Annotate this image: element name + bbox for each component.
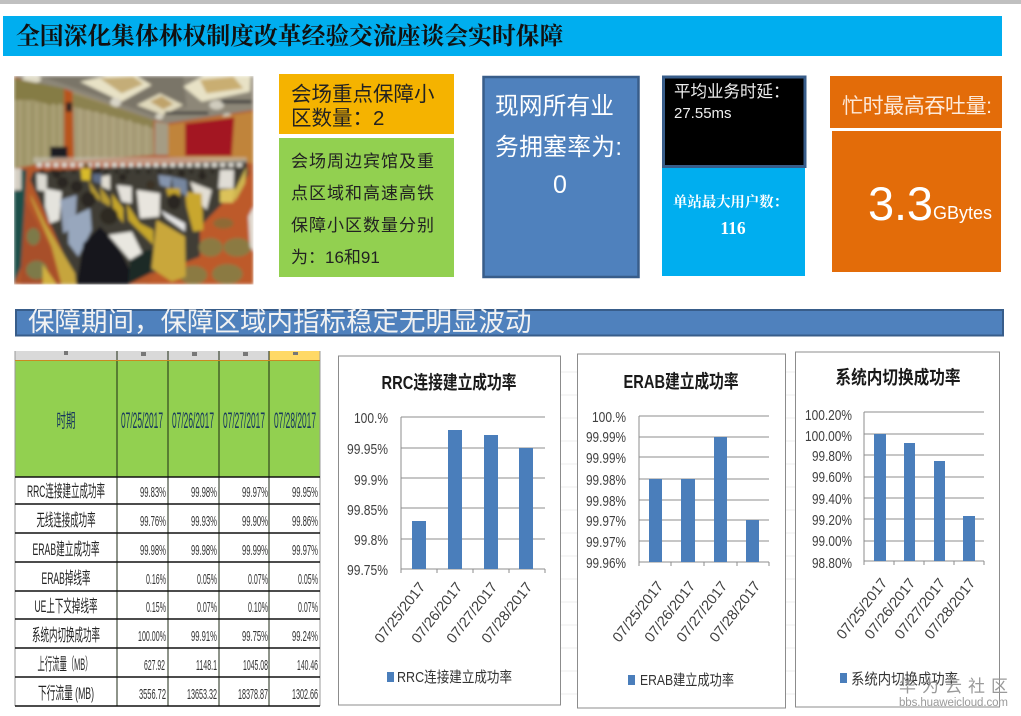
section banner xyxy=(16,307,1003,337)
data table: 上行流量（MB） xyxy=(38,655,92,674)
bar chart: RRC: 99.9% xyxy=(354,472,388,489)
bar chart: RRC: RRC连接建立成功率 xyxy=(382,372,516,393)
panel: surrounding cell count (green): 会场周边宾馆及重 xyxy=(291,152,434,171)
bar chart: ERAB: ERAB建立成功率 xyxy=(624,371,738,392)
bar chart: ERAB xyxy=(578,354,786,708)
bar chart: intra-system handover: 系统内切换成功率 xyxy=(836,367,960,388)
data table: 99.86% xyxy=(292,513,318,530)
panel: peak throughput value (orange) xyxy=(832,131,1001,272)
panel: key cell count (yellow) xyxy=(279,74,454,134)
bar chart: ERAB: 99.96% xyxy=(586,555,626,572)
data table: ERAB掉线率 xyxy=(42,569,90,588)
bar chart: RRC: 100.% xyxy=(354,410,388,427)
data table: 0.15% xyxy=(146,599,166,616)
bar chart: ERAB: 99.97% xyxy=(586,513,626,530)
bar chart: intra-system handover: 07/26/2017 xyxy=(862,576,919,643)
bar chart: ERAB: 99.99% xyxy=(586,450,626,467)
data table: 系统内切换成功率 xyxy=(32,626,100,645)
bar chart: RRC: 07/26/2017 xyxy=(409,580,466,647)
panel: surrounding cell count (green) xyxy=(279,138,454,277)
section banner: 保障期间，保障区域内指标稳定无明显波动 xyxy=(28,307,532,337)
bar chart: ERAB: 100.% xyxy=(592,409,626,426)
data table: 无线连接成功率 xyxy=(36,511,96,530)
data table: 99.95% xyxy=(292,484,318,501)
panel: congestion rate (blue): 0 xyxy=(553,171,567,199)
bar chart: RRC: 99.95% xyxy=(347,441,388,458)
data table: 0.16% xyxy=(146,571,166,588)
bar chart: RRC: 99.8% xyxy=(354,532,388,549)
data table: 99.24% xyxy=(292,628,318,645)
data table: 0.05% xyxy=(298,571,318,588)
data table: 99.98% xyxy=(140,542,166,559)
bar chart: ERAB: ERAB建立成功率 xyxy=(640,672,734,689)
panel: max users per site (cyan): 单站最大用户数： xyxy=(673,193,788,211)
data table: 0.07% xyxy=(298,599,318,616)
bar chart: intra-system handover: 98.80% xyxy=(812,555,852,572)
bar chart: ERAB: 07/26/2017 xyxy=(642,579,699,646)
bar chart: intra-system handover: 99.60% xyxy=(812,469,852,486)
data table: 0.07% xyxy=(197,599,217,616)
data table: 1148.1 xyxy=(196,657,217,674)
watermark: bbs.huaweicloud.com xyxy=(899,697,1008,709)
bar chart: intra-system handover xyxy=(796,352,1000,707)
data table: 0.05% xyxy=(197,571,217,588)
bar chart: ERAB: 07/27/2017 xyxy=(674,579,731,646)
bar chart: ERAB: 99.98% xyxy=(586,472,626,489)
panel: key cell count (yellow): 区数量：2 xyxy=(291,107,384,130)
data table: 99.76% xyxy=(140,513,166,530)
bar chart: RRC: 07/28/2017 xyxy=(479,580,536,647)
photo: conference room xyxy=(14,75,253,284)
panel: key cell count (yellow): 会场重点保障小 xyxy=(291,83,434,106)
panel: average latency (black): 27.55ms xyxy=(674,105,732,122)
bar chart: intra-system handover: 07/28/2017 xyxy=(922,576,979,643)
title banner xyxy=(3,16,1002,56)
bar chart: RRC: RRC连接建立成功率 xyxy=(397,669,512,686)
panel: surrounding cell count (green): 保障小区数量分别 xyxy=(291,216,434,235)
panel: peak throughput label (orange): 忙时最高吞吐量: xyxy=(842,95,992,118)
data table: 140.46 xyxy=(297,657,318,674)
bar chart: RRC: 07/27/2017 xyxy=(444,580,501,647)
bar chart: intra-system handover: 99.40% xyxy=(812,491,852,508)
panel: peak throughput label (orange) xyxy=(830,76,1002,128)
data table: 13653.32 xyxy=(187,686,217,703)
panel: congestion rate (blue): 现网所有业 xyxy=(495,93,614,120)
bar chart: intra-system handover: 07/27/2017 xyxy=(892,576,949,643)
data table: 1045.08 xyxy=(243,657,268,674)
data table: RRC连接建立成功率 xyxy=(27,482,105,501)
data table: 99.97% xyxy=(292,542,318,559)
bar chart: ERAB: 99.99% xyxy=(586,429,626,446)
data table: 99.83% xyxy=(140,484,166,501)
data table xyxy=(15,351,320,706)
data table: 99.98% xyxy=(191,484,217,501)
panel: average latency (black) xyxy=(664,77,805,166)
data table: 99.98% xyxy=(191,542,217,559)
bar chart: intra-system handover: 系统内切换成功率 xyxy=(851,671,958,688)
data table: 99.99% xyxy=(242,542,268,559)
panel: max users per site (cyan): 116 xyxy=(720,218,746,238)
panel: surrounding cell count (green): 点区域和高速高铁 xyxy=(291,184,434,203)
panel: max users per site (cyan) xyxy=(662,168,805,276)
panel: congestion rate (blue) xyxy=(484,77,638,277)
data table: 99.93% xyxy=(191,513,217,530)
bar chart: intra-system handover: 100.20% xyxy=(805,407,852,424)
data table: 07/26/2017 xyxy=(172,408,214,433)
text: 07/28/2017 xyxy=(274,408,316,433)
bar chart: RRC xyxy=(338,356,560,705)
data table: 3556.72 xyxy=(139,686,166,703)
bar chart: intra-system handover: 99.20% xyxy=(812,512,852,529)
data table: 下行流量 (MB) xyxy=(38,684,94,703)
bar chart: RRC: 99.85% xyxy=(347,502,388,519)
data table: 627.92 xyxy=(144,657,165,674)
data table: 100.00% xyxy=(138,628,166,645)
bar chart: ERAB: 99.97% xyxy=(586,534,626,551)
data table: UE上下文掉线率 xyxy=(34,597,98,616)
data table: 时期 xyxy=(56,410,76,432)
bar chart: intra-system handover: 99.00% xyxy=(812,533,852,550)
title banner: 全国深化集体林权制度改革经验交流座谈会实时保障 xyxy=(16,22,564,50)
data table: 99.97% xyxy=(242,484,268,501)
bar chart: ERAB: 07/28/2017 xyxy=(707,579,764,646)
panel: congestion rate (blue): 务拥塞率为: xyxy=(495,134,622,161)
data table: 1302.66 xyxy=(292,686,318,703)
panel: peak throughput value (orange): GBytes xyxy=(933,203,992,223)
data table: 99.91% xyxy=(191,628,217,645)
bar chart: ERAB: 99.98% xyxy=(586,493,626,510)
data table: 07/27/2017 xyxy=(223,408,265,433)
bar chart: intra-system handover: 07/25/2017 xyxy=(834,576,891,643)
bar chart: ERAB: 07/25/2017 xyxy=(610,579,667,646)
panel: peak throughput value (orange): 3.3 xyxy=(868,177,933,230)
data table: 18378.87 xyxy=(238,686,268,703)
data table: 0.07% xyxy=(248,571,268,588)
bar chart: RRC: 99.75% xyxy=(347,562,388,579)
panel: surrounding cell count (green): 为：16和91 xyxy=(291,248,380,267)
data table: 99.90% xyxy=(242,513,268,530)
watermark: 华为云社区 xyxy=(899,677,1008,696)
data table: ERAB建立成功率 xyxy=(32,540,100,559)
bar chart: intra-system handover: 100.00% xyxy=(805,428,852,445)
data table: 07/25/2017 xyxy=(121,408,163,433)
data table: 99.75% xyxy=(242,628,268,645)
bar chart: intra-system handover: 99.80% xyxy=(812,448,852,465)
panel: average latency (black): 平均业务时延： xyxy=(674,82,790,101)
data table: 0.10% xyxy=(248,599,268,616)
watermark xyxy=(899,677,1008,709)
bar chart: RRC: 07/25/2017 xyxy=(372,580,429,647)
